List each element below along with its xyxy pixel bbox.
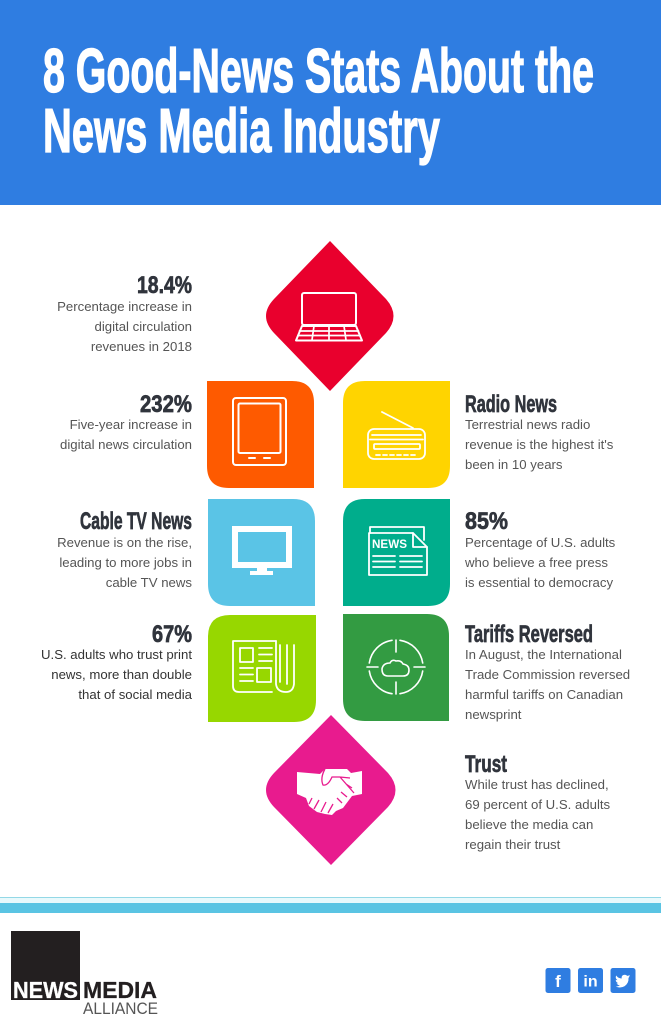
text block: Cable TV News: Cable TV News <box>80 508 192 535</box>
header banner <box>0 0 661 205</box>
text block: Trust: 69 percent of U.S. adults <box>465 797 611 812</box>
text block: 232%: Five-year increase in <box>70 417 192 432</box>
icon: LinkedIn <box>578 968 603 993</box>
icon: handshake <box>297 769 362 815</box>
logo: News Media Alliance: MEDIA <box>83 977 157 1003</box>
text block: Radio News: been in 10 years <box>465 457 563 472</box>
text block: 85% <box>464 508 616 590</box>
icon: laptop <box>296 293 362 340</box>
text block: Cable TV News <box>57 508 192 590</box>
text block: 18.4%: 18.4% <box>137 272 192 299</box>
icon: tablet <box>233 398 286 465</box>
text block: Cable TV News: leading to more jobs in <box>59 555 192 570</box>
panel: lime tile with folded paper <box>208 615 316 722</box>
text block: 67%: news, more than double <box>51 667 192 682</box>
text block: Trust: While trust has declined, <box>465 777 609 792</box>
text block: Tariffs Reversed: In August, the International <box>465 647 622 662</box>
text block: Tariffs Reversed: harmful tariffs on Canadian <box>465 687 623 702</box>
text block: Trust: believe the media can <box>465 817 593 832</box>
text block: Radio News: revenue is the highest it's <box>465 437 614 452</box>
text block: 232% <box>60 391 192 452</box>
text block: Cable TV News: cable TV news <box>106 575 192 590</box>
logo: News Media Alliance <box>11 931 158 1018</box>
text block: Cable TV News: Revenue is on the rise, <box>57 535 192 550</box>
text block: Tariffs Reversed <box>465 621 630 722</box>
text block: 85%: is essential to democracy <box>465 575 613 590</box>
panel: green tile with cloud target <box>343 614 449 721</box>
icon: radio <box>368 412 425 459</box>
text block: 18.4% <box>57 272 192 354</box>
text block: 232%: digital news circulation <box>60 437 192 452</box>
title <box>43 37 594 166</box>
icon: news page: NEWS <box>372 539 407 551</box>
text block: 18.4%: digital circulation <box>94 319 192 334</box>
text block: Radio News: Terrestrial news radio <box>465 417 590 432</box>
text block: Radio News <box>465 391 614 472</box>
logo: News Media Alliance: NEWS <box>13 977 78 1003</box>
icon: LinkedIn: in <box>583 974 598 990</box>
icon: Facebook: f <box>555 972 561 991</box>
text block: Tariffs Reversed: Tariffs Reversed <box>465 621 593 648</box>
panel: red diamond with laptop <box>266 241 394 391</box>
text block: Trust <box>465 751 611 852</box>
icon: cloud target <box>367 640 425 694</box>
icon: folded newspaper <box>233 641 294 692</box>
icon: Twitter <box>610 968 636 993</box>
text block: Trust: Trust <box>465 751 507 778</box>
panel: blue tile with television <box>208 499 315 606</box>
text block: 85%: Percentage of U.S. adults <box>465 535 616 550</box>
text block: 67%: 67% <box>152 621 192 648</box>
text block: 18.4%: revenues in 2018 <box>91 339 192 354</box>
text block: 85%: 85% <box>465 508 508 535</box>
logo: News Media Alliance: ALLIANCE <box>83 1000 158 1018</box>
footer rule <box>0 897 661 913</box>
panel: yellow tile with radio <box>343 381 450 488</box>
text block: Tariffs Reversed: newsprint <box>465 707 522 722</box>
text block: 67%: U.S. adults who trust print <box>41 647 192 662</box>
panel: pink diamond with handshake <box>266 715 396 865</box>
icon: television <box>235 529 289 575</box>
text block: 67% <box>41 621 193 702</box>
title: News Media Industry <box>43 97 440 166</box>
text block: Tariffs Reversed: Trade Commission reversed <box>465 667 630 682</box>
panel: orange tile with tablet <box>207 381 314 488</box>
panel: teal tile with newspaper <box>343 499 450 606</box>
text block: 67%: that of social media <box>78 687 193 702</box>
text block: Radio News: Radio News <box>465 391 557 418</box>
text block: 85%: who believe a free press <box>464 555 608 570</box>
icon: Facebook <box>546 968 570 993</box>
text block: Trust: regain their trust <box>465 837 561 852</box>
text block: 232%: 232% <box>140 391 192 418</box>
text block: 18.4%: Percentage increase in <box>57 299 192 314</box>
